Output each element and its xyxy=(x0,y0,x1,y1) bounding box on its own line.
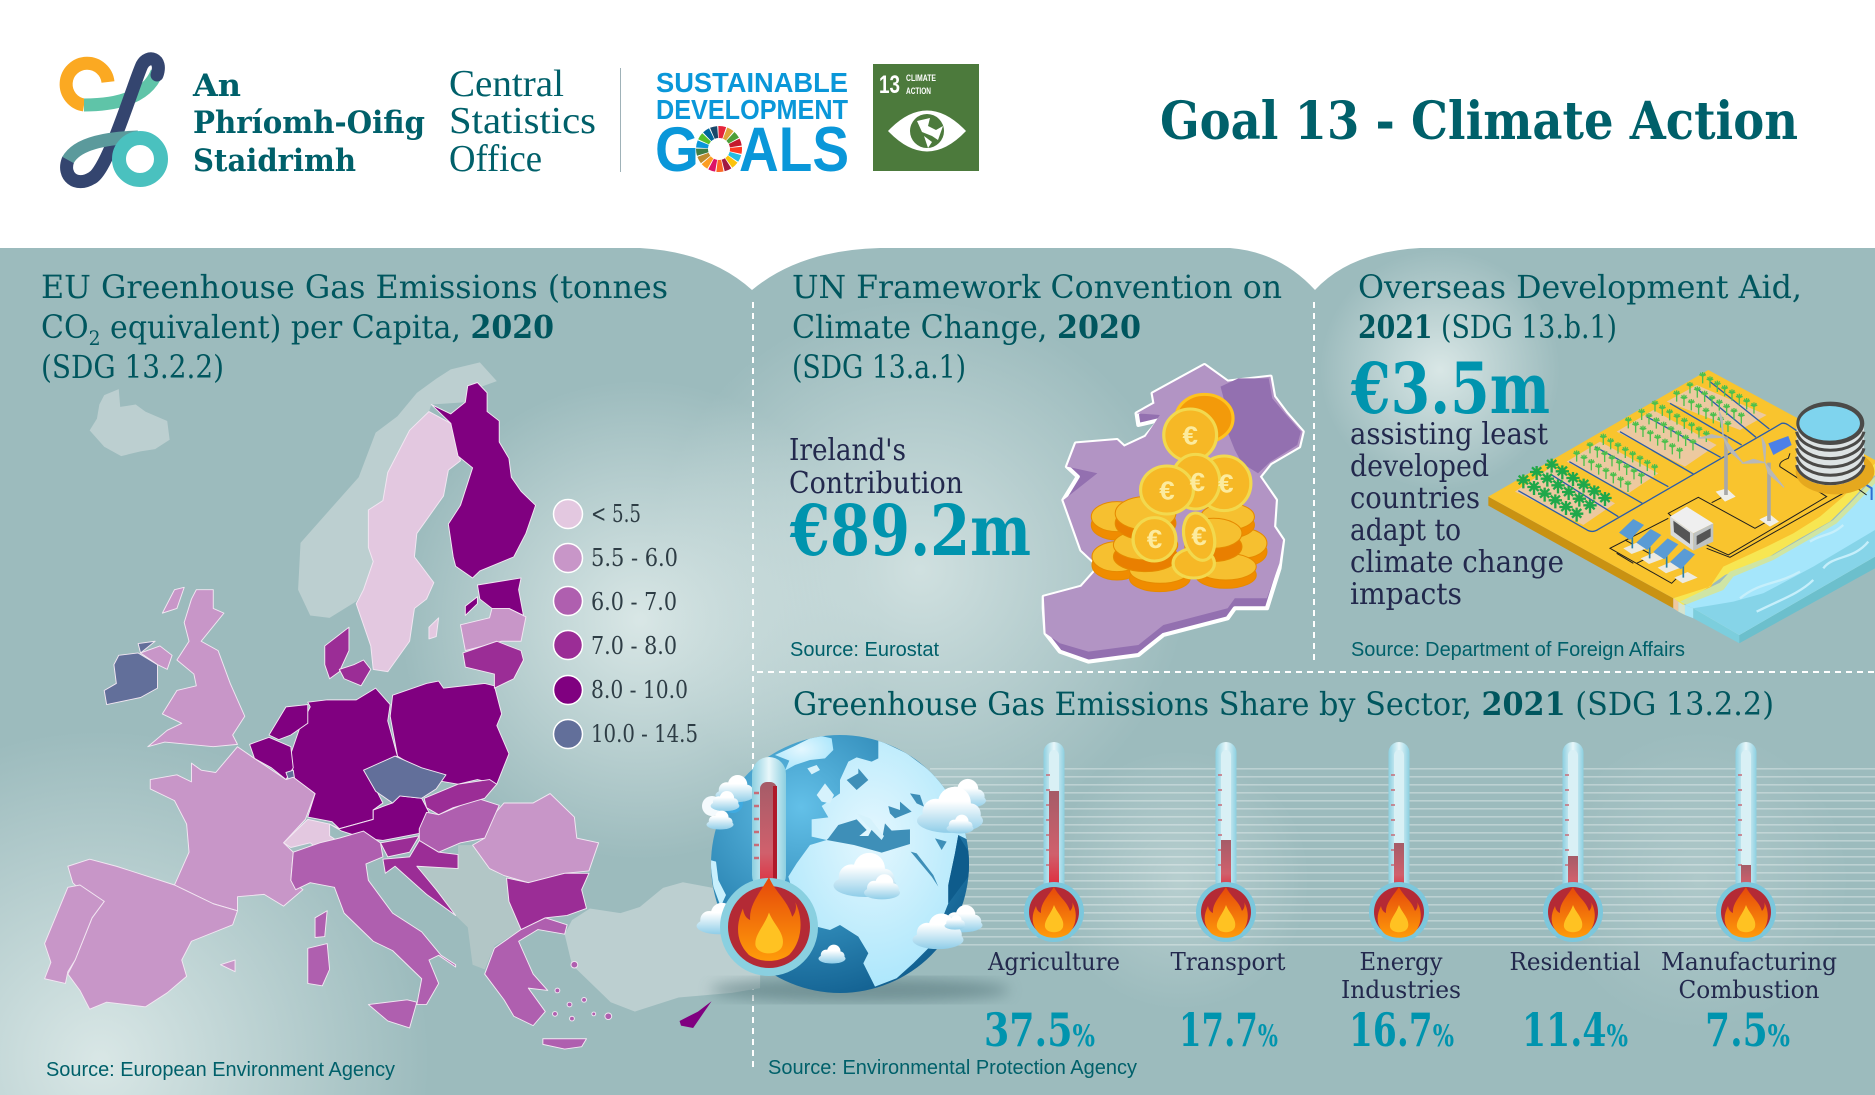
large thermometer xyxy=(720,757,818,976)
heading: emissions by sector: Greenhouse Gas Emissions Share by Sector, 2021 (SDG 13.2.2) xyxy=(793,685,1774,723)
icon: globe with thermometer xyxy=(696,735,1010,1002)
callout: Ireland's contribution xyxy=(789,433,1031,572)
legend: 10.0 - 14.5 xyxy=(591,720,698,748)
legend: 5.5 - 6.0 xyxy=(591,544,678,572)
heading: UNFCCC: UN Framework Convention on xyxy=(792,268,1282,306)
panel: EU map xyxy=(41,268,761,1081)
English name xyxy=(449,63,596,180)
sector: energy industries: 16.7% xyxy=(1349,1003,1454,1057)
sector: energy industries: Industries xyxy=(1341,976,1461,1004)
English name: Central xyxy=(449,63,564,105)
5.5 to 6.0 band xyxy=(45,587,599,1009)
callout: 3.5m: adapt to xyxy=(1350,513,1461,548)
heading: EU emissions: (SDG 13.2.2) xyxy=(41,348,224,386)
source: DFA: Source: Department of Foreign Affairs xyxy=(1351,639,1685,661)
isometric climate adaptation farm xyxy=(1488,370,1875,643)
callout: 3.5m: impacts xyxy=(1350,577,1462,612)
wiring xyxy=(1610,453,1867,583)
panel background xyxy=(0,248,1875,1095)
sector: agriculture: Agriculture xyxy=(987,948,1120,976)
sector: energy industries: Energy xyxy=(1360,948,1443,976)
Irish name: An xyxy=(192,68,241,104)
SDG logo: DEVELOPMENT xyxy=(656,94,848,125)
wind turbines xyxy=(1698,412,1784,527)
panel: emissions by sector xyxy=(696,685,1837,1079)
sector: transport: Transport xyxy=(1170,948,1286,976)
heading: EU emissions: 2020 xyxy=(470,308,554,346)
heading: EU emissions xyxy=(41,268,668,386)
heading: EU emissions: 2 xyxy=(89,326,101,350)
icon: SDG colour wheel xyxy=(702,132,736,166)
callout: Ireland's contribution: €89.2m xyxy=(789,489,1031,572)
sector: manufacturing combustion xyxy=(1661,742,1837,1057)
panel: overseas development aid xyxy=(1350,268,1875,661)
standing coins: € xyxy=(1159,476,1175,505)
panel: UN framework xyxy=(789,268,1303,662)
10.0 to 14.5 band xyxy=(104,641,446,803)
sector: agriculture: 37.5% xyxy=(984,1003,1095,1057)
icon: Ireland map with coins xyxy=(1044,365,1303,662)
callout: 3.5m: developed xyxy=(1350,449,1489,484)
English name: Statistics xyxy=(449,100,596,142)
callout: 3.5m: climate change xyxy=(1350,545,1564,580)
heading: EU emissions: CO xyxy=(41,308,92,346)
callout: 3.5m: countries xyxy=(1350,481,1480,516)
dotted dividers xyxy=(753,302,1875,1068)
irrigation pipes xyxy=(1518,382,1872,531)
7.0 to 8.0 band xyxy=(325,627,589,930)
heading: ODA: 2021 (SDG 13.b.1) xyxy=(1358,308,1617,346)
icon: CSO knot logo xyxy=(66,59,161,182)
callout: 3.5m xyxy=(1350,347,1564,612)
standing coins: € xyxy=(1190,468,1205,497)
map of Europe xyxy=(45,362,761,1049)
crops xyxy=(1517,372,1757,522)
legend xyxy=(554,500,698,748)
sector: residential: Residential xyxy=(1510,948,1640,976)
standing coins: € xyxy=(1218,469,1234,498)
SDG logo: ALS xyxy=(739,115,849,185)
icon: SDG 13 climate action square: CLIMATE xyxy=(906,73,936,83)
standing coins: € xyxy=(1182,421,1198,450)
legend: 8.0 - 10.0 xyxy=(591,676,688,704)
sector: manufacturing combustion: Combustion xyxy=(1678,976,1820,1004)
icon: SDG 13 climate action square: ACTION xyxy=(906,86,931,96)
coin stacks xyxy=(1091,497,1267,592)
legend: 6.0 - 7.0 xyxy=(591,588,677,616)
legend: 7.0 - 8.0 xyxy=(591,632,677,660)
8.0 to 10.0 band xyxy=(250,382,712,1028)
heading: ODA xyxy=(1358,268,1802,346)
SDG logo xyxy=(655,67,849,185)
sector: residential xyxy=(1510,742,1640,1057)
crop plots xyxy=(1515,385,1767,525)
water tank xyxy=(1796,402,1874,494)
heading: UNFCCC xyxy=(792,268,1282,386)
heading: ODA: Overseas Development Aid, xyxy=(1358,268,1802,306)
sector: residential: 11.4% xyxy=(1522,1003,1628,1057)
source: EPA: Source: Environmental Protection Agency xyxy=(768,1057,1137,1079)
source: Eurostat: Source: Eurostat xyxy=(790,639,939,661)
callout: 3.5m: €3.5m xyxy=(1350,347,1550,430)
SDG logo: SUSTAINABLE xyxy=(656,67,848,98)
lightest band xyxy=(284,412,460,852)
generator xyxy=(1670,507,1713,551)
SDG logo: G xyxy=(655,115,699,185)
source: EEA: Source: European Environment Agency xyxy=(46,1059,395,1081)
callout: Ireland's contribution: Ireland's xyxy=(789,433,906,468)
pump xyxy=(1768,436,1792,455)
sector: transport xyxy=(1170,742,1286,1057)
sector: manufacturing combustion: 7.5% xyxy=(1705,1003,1790,1057)
heading: EU emissions: EU Greenhouse Gas Emissions (tonnes xyxy=(41,268,668,306)
heading: UNFCCC: Climate Change, 2020 xyxy=(792,308,1141,346)
sector: manufacturing combustion: Manufacturing xyxy=(1661,948,1837,976)
standing coins: € xyxy=(1191,522,1207,551)
standing coins xyxy=(1133,394,1251,578)
sector: agriculture xyxy=(984,742,1120,1057)
callout: 3.5m: assisting least xyxy=(1350,417,1548,452)
clouds xyxy=(696,775,986,964)
sector: transport: 17.7% xyxy=(1179,1003,1278,1057)
Irish name xyxy=(192,68,425,179)
callout: Ireland's contribution: Contribution xyxy=(789,466,963,501)
solar panels xyxy=(1619,519,1698,583)
English name: Office xyxy=(449,138,542,180)
standing coins: € xyxy=(1147,525,1162,554)
legend: < 5.5 xyxy=(591,500,641,528)
6.0 to 7.0 band xyxy=(291,798,612,1049)
header logo: Central Statistics Office xyxy=(66,59,596,182)
sector: energy industries xyxy=(1341,742,1461,1057)
icon: SDG 13 climate action square: 13 xyxy=(879,71,900,99)
heading: EU emissions: equivalent) per Capita, xyxy=(101,308,470,346)
title: Goal 13 - Climate Action xyxy=(1160,91,1798,152)
heading: UNFCCC: (SDG 13.a.1) xyxy=(792,348,966,386)
icon: SDG 13 climate action square xyxy=(873,64,979,171)
Irish name: Staidrimh xyxy=(193,143,356,179)
Irish name: Phríomh-Oifig xyxy=(193,105,425,141)
